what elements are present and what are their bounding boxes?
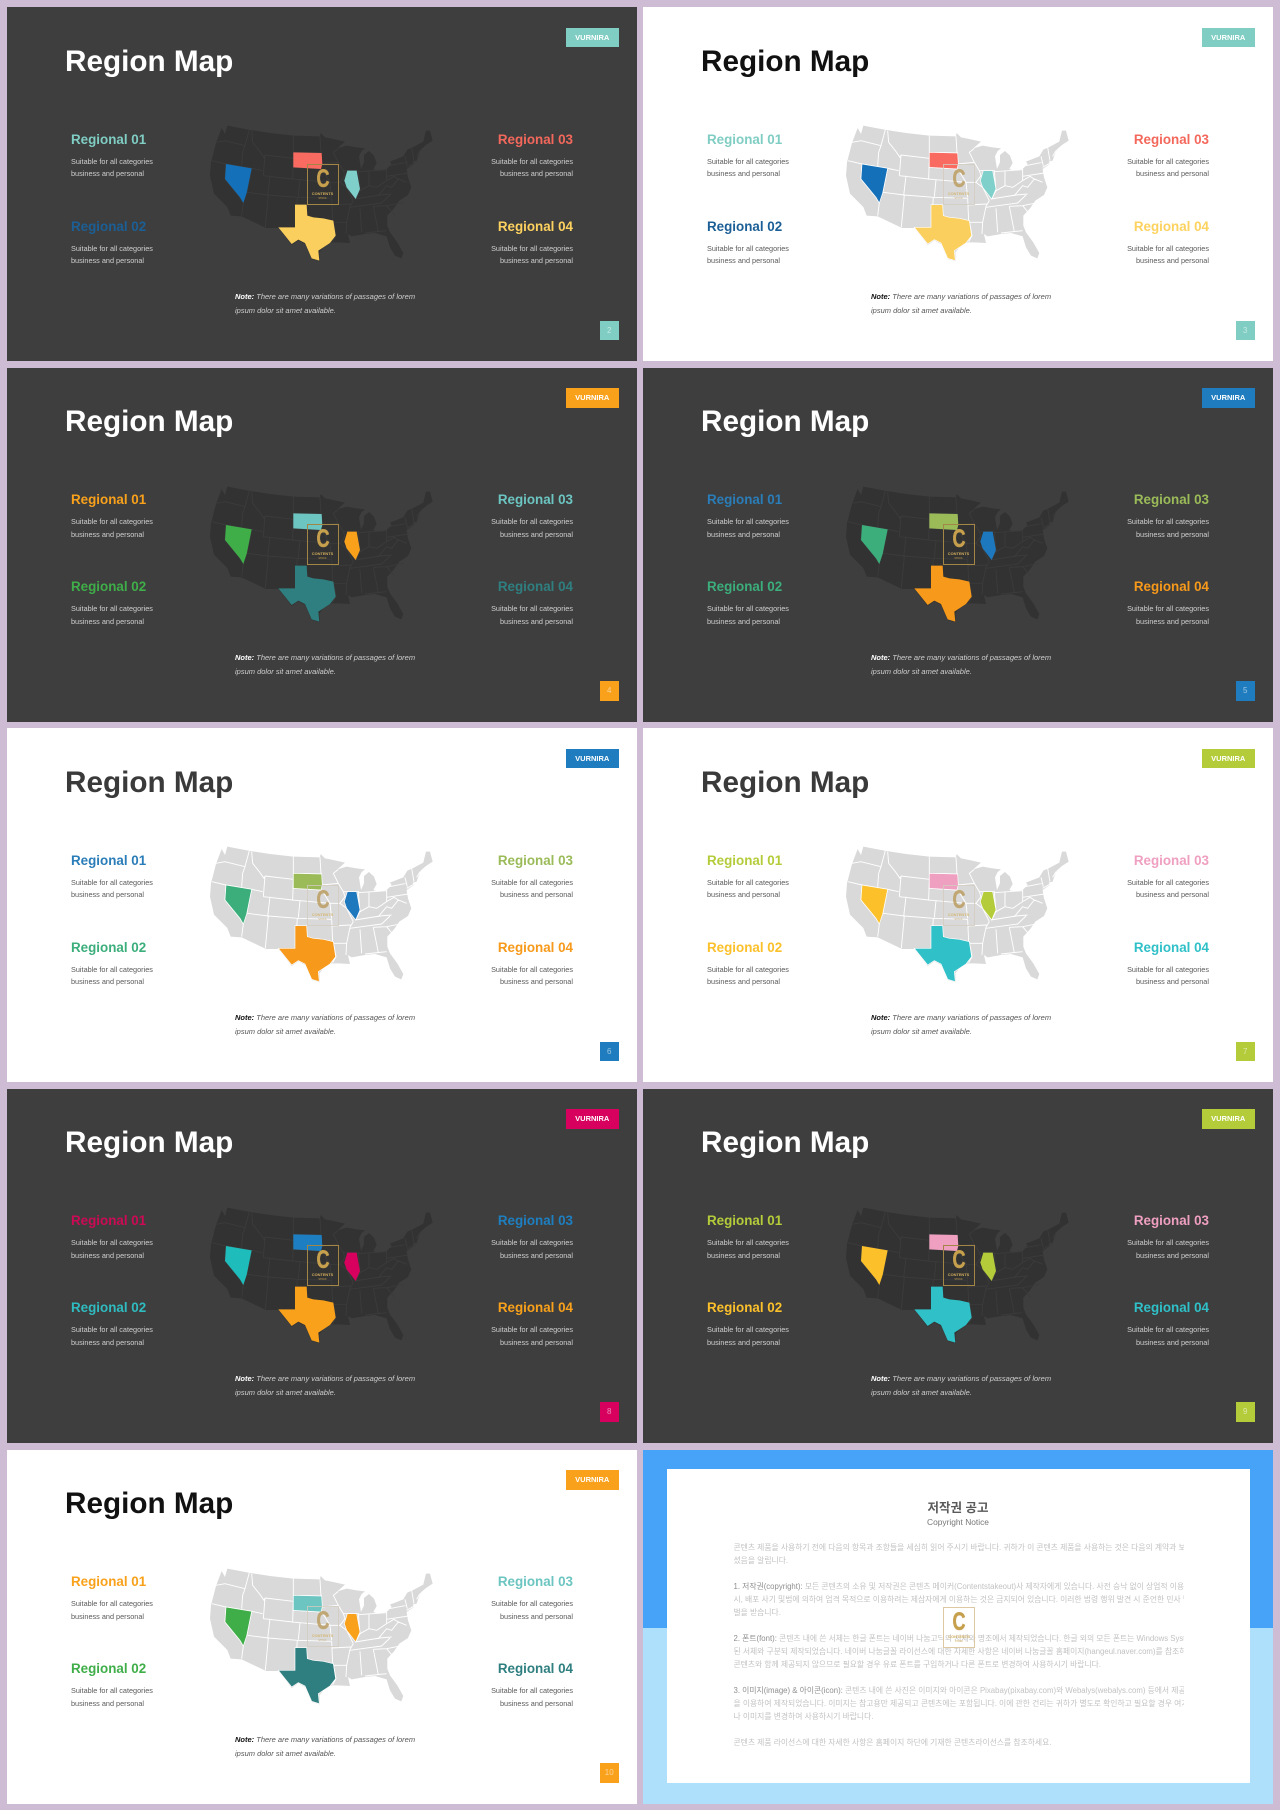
logo [306, 164, 338, 204]
region 03: business and personal [1136, 890, 1209, 899]
copyright body text: 콘텐츠 제품 라이선스에 대한 자세한 사항은 홈페이지 하단에 기재한 콘텐츠라이선스를 참조하세요. [734, 1738, 1051, 1747]
region 01: Suitable for all categories [707, 517, 789, 526]
region 02: Regional 02 [71, 579, 146, 594]
tag: VURNIRA [1202, 388, 1255, 408]
region 01 [71, 492, 153, 539]
region 04: Suitable for all categories [491, 1686, 573, 1695]
page number [600, 320, 619, 340]
tag: VURNIRA [566, 28, 619, 47]
region 04: Regional 04 [1134, 218, 1209, 234]
page number [1236, 1402, 1255, 1422]
region 02: business and personal [707, 1338, 780, 1347]
region 04: Regional 04 [1134, 1300, 1209, 1315]
logo [306, 1606, 338, 1647]
region 04 [491, 218, 573, 265]
page number [600, 1763, 619, 1782]
region 01 [71, 1572, 201, 1624]
logo: CONTENTS [948, 912, 969, 916]
region 01: Suitable for all categories [71, 1599, 153, 1608]
page number: 10 [605, 1768, 614, 1777]
region 03: Regional 03 [1134, 1213, 1209, 1228]
tag: VURNIRA [1202, 28, 1255, 47]
region 04: Suitable for all categories [491, 965, 573, 974]
region 04: business and personal [500, 1699, 573, 1708]
page number: 3 [1243, 326, 1247, 334]
region 02: Regional 02 [707, 218, 782, 234]
region 03 [1127, 852, 1209, 899]
map of US states [7, 1450, 637, 1804]
logo [306, 884, 338, 926]
region 02: business and personal [707, 617, 780, 626]
region 03 [443, 1572, 573, 1624]
region 04: Suitable for all categories [1127, 965, 1209, 974]
tag: VURNIRA [566, 1470, 619, 1490]
copyright subtitle: Copyright Notice [927, 1517, 989, 1527]
map of US states [210, 487, 432, 622]
copyright body text: 벌을 받습니다. [734, 1608, 781, 1617]
region 03: Suitable for all categories [1127, 1238, 1209, 1247]
tag: VURNIRA [1202, 1109, 1255, 1128]
region 02: Regional 02 [707, 1300, 782, 1315]
tag: VURNIRA: VURNIRA [575, 393, 609, 402]
copyright body text: 콘텐츠와 함께 제공되지 않으므로 필요할 경우 유료 폰트를 구입하거나 다른 폰트로 변경하여 사용하시기 바랍니다. [734, 1660, 1101, 1669]
region 01: Regional 01 [707, 1213, 782, 1228]
region 04: business and personal [1136, 256, 1209, 265]
region 01: business and personal [707, 169, 780, 178]
region 02 [71, 579, 153, 626]
region 03: business and personal [500, 1251, 573, 1260]
region 01: Suitable for all categories [71, 1238, 153, 1247]
region 04: business and personal [500, 1338, 573, 1347]
region 03: Regional 03 [498, 852, 573, 868]
note: Note: There are many variations of passages of lorem [235, 652, 415, 662]
copyright body text [734, 1541, 1184, 1753]
region 03: business and personal [500, 1612, 573, 1621]
title: Region Map [701, 44, 869, 78]
region 04 [443, 1298, 573, 1350]
region 02 [71, 218, 153, 265]
region 03: Suitable for all categories [1127, 157, 1209, 166]
logo: STOCK [955, 1640, 963, 1642]
region 01 [71, 852, 153, 899]
logo: STOCK [318, 557, 327, 560]
region 01 [707, 132, 789, 178]
logo: CONTENTS [312, 912, 333, 916]
region 01: Suitable for all categories [707, 157, 789, 166]
logo: C [316, 1246, 329, 1274]
map of US states [846, 126, 1068, 262]
region 04 [443, 1659, 573, 1711]
region 02: Suitable for all categories [71, 604, 153, 613]
logo: C [316, 1607, 329, 1635]
note [871, 292, 1051, 315]
region 03: Regional 03 [1134, 852, 1209, 868]
map of US states [643, 1088, 1273, 1442]
region 03: Suitable for all categories [1127, 878, 1209, 887]
region 02: Regional 02 [71, 1300, 146, 1315]
logo: C [952, 525, 965, 553]
region 04: Regional 04 [1134, 579, 1209, 594]
note: ipsum dolor sit amet available. [871, 306, 972, 315]
region 03 [491, 492, 573, 539]
page number: 8 [607, 1407, 611, 1416]
logo [306, 1245, 338, 1286]
title: Region Map [65, 1126, 233, 1159]
logo: STOCK [954, 557, 963, 560]
panel: slide 3 light [643, 7, 1273, 361]
region 03: Regional 03 [498, 132, 573, 146]
region 03 [1079, 1211, 1209, 1263]
note: ipsum dolor sit amet available. [235, 1748, 336, 1758]
note [871, 652, 1051, 676]
white card [666, 1469, 1250, 1783]
note: ipsum dolor sit amet available. [871, 666, 972, 676]
note [871, 1372, 1071, 1400]
note: Note: There are many variations of passages of lorem [871, 1013, 1051, 1022]
title: Region Map [701, 1126, 869, 1159]
logo [942, 884, 974, 926]
region 03: Suitable for all categories [491, 517, 573, 526]
note: Note: There are many variations of passages of lorem [871, 652, 1051, 662]
region 01: Suitable for all categories [71, 878, 153, 887]
note [235, 1013, 415, 1036]
region 03: Suitable for all categories [491, 878, 573, 887]
logo: C [316, 525, 329, 553]
region 03: business and personal [500, 530, 573, 539]
tag: VURNIRA [1202, 748, 1255, 768]
page number [1236, 1042, 1255, 1061]
logo [942, 1245, 974, 1286]
region 04: Suitable for all categories [491, 244, 573, 253]
region 01: business and personal [707, 530, 780, 539]
panel: slide 8 dark [7, 1088, 637, 1442]
region 03 [491, 852, 573, 899]
panel: slide 7 light [643, 728, 1273, 1082]
map of US states [210, 1208, 432, 1343]
tag: VURNIRA: VURNIRA [575, 32, 609, 42]
logo: CONTENTS [312, 190, 333, 196]
page number: 5 [1243, 686, 1247, 695]
region 04 [1127, 579, 1209, 626]
title: Region Map [65, 766, 233, 798]
region 01 [71, 132, 153, 178]
page number: 7 [1243, 1046, 1247, 1056]
logo: CONTENTS [312, 551, 333, 556]
region 04 [491, 940, 573, 986]
region 02 [707, 940, 789, 986]
region 01: business and personal [71, 890, 144, 899]
region 02: Regional 02 [71, 218, 146, 234]
page number [600, 681, 619, 700]
note [235, 1732, 435, 1760]
region 02: business and personal [71, 1338, 144, 1347]
region 02: business and personal [707, 977, 780, 986]
region 03: Regional 03 [498, 492, 573, 507]
note: ipsum dolor sit amet available. [871, 1388, 972, 1396]
region 03: Suitable for all categories [491, 157, 573, 166]
region 01 [71, 1213, 153, 1260]
region 03: Suitable for all categories [491, 1238, 573, 1247]
map of US states [846, 487, 1068, 622]
logo: C [952, 1246, 965, 1274]
panel: copyright notice [643, 1450, 1273, 1804]
region 04: Regional 04 [498, 940, 573, 954]
logo: CONTENTS [312, 1633, 333, 1638]
region 01: Regional 01 [71, 132, 146, 146]
region 02 [71, 1659, 201, 1711]
region 01: Suitable for all categories [707, 1238, 789, 1247]
region 03: business and personal [500, 169, 573, 178]
note: Note: There are many variations of passages of lorem [871, 1374, 1051, 1382]
region 01: Suitable for all categories [71, 157, 153, 166]
logo: STOCK [954, 1278, 963, 1281]
logo: C [952, 164, 965, 192]
region 02 [71, 940, 153, 986]
region 03: Suitable for all categories [491, 1599, 573, 1608]
region 01: Regional 01 [71, 1213, 146, 1228]
region 01: business and personal [71, 530, 144, 539]
logo: STOCK [318, 1278, 327, 1281]
map of US states [210, 846, 432, 982]
title: Region Map [65, 44, 233, 78]
page number [600, 1042, 619, 1061]
logo: STOCK [954, 196, 963, 200]
region 04: business and personal [1136, 617, 1209, 626]
region 02: Regional 02 [707, 579, 782, 594]
region 03: business and personal [1136, 530, 1209, 539]
note: Note: There are many variations of passages of lorem [235, 1374, 415, 1382]
region 01: Regional 01 [71, 492, 146, 507]
region 02: Regional 02 [71, 1661, 146, 1676]
region 01 [707, 492, 789, 539]
note: ipsum dolor sit amet available. [235, 1027, 336, 1036]
region 01 [707, 1211, 837, 1263]
region 04: business and personal [500, 256, 573, 265]
region 02 [707, 218, 789, 265]
region 01: Regional 01 [707, 852, 782, 868]
page number: 9 [1243, 1407, 1247, 1416]
region 02: Suitable for all categories [71, 965, 153, 974]
note: ipsum dolor sit amet available. [235, 666, 336, 676]
copyright body text: 셨음을 알립니다. [734, 1556, 788, 1565]
note: Note: There are many variations of passages of lorem [235, 1734, 415, 1744]
region 01: business and personal [71, 169, 144, 178]
region 04 [1079, 1298, 1209, 1350]
region 04 [1127, 218, 1209, 265]
region 02: Suitable for all categories [707, 1325, 789, 1334]
page number: 4 [607, 686, 611, 695]
region 04: Regional 04 [498, 218, 573, 234]
region 04: Suitable for all categories [491, 1325, 573, 1334]
note: Note: There are many variations of passages of lorem [235, 1013, 415, 1022]
region 04: Regional 04 [498, 579, 573, 594]
region 04: business and personal [500, 617, 573, 626]
note [871, 1013, 1051, 1036]
note: ipsum dolor sit amet available. [871, 1027, 972, 1036]
region 01: business and personal [71, 1612, 144, 1621]
region 02: Suitable for all categories [71, 244, 153, 253]
note: Note: There are many variations of passages of lorem [235, 292, 415, 301]
region 02: Suitable for all categories [707, 604, 789, 613]
logo [942, 164, 974, 204]
logo: CONTENTS [948, 1634, 970, 1638]
logo: STOCK [954, 918, 963, 920]
region 03: Regional 03 [498, 1213, 573, 1228]
tag: VURNIRA [566, 748, 619, 768]
region 04: Suitable for all categories [1127, 1325, 1209, 1334]
copyright body text: 나 이미지를 변경하여 사용하시기 바랍니다. [734, 1712, 873, 1721]
tag: VURNIRA: VURNIRA [1211, 393, 1245, 402]
logo [943, 1606, 975, 1648]
logo: STOCK [318, 1639, 327, 1642]
logo: C [952, 886, 965, 914]
region 04: Suitable for all categories [1127, 604, 1209, 613]
region 04: Regional 04 [1134, 940, 1209, 954]
region 02: business and personal [707, 256, 780, 265]
logo [942, 524, 974, 565]
region 02: business and personal [71, 977, 144, 986]
tag: VURNIRA: VURNIRA [575, 754, 609, 762]
title: Region Map [65, 1487, 233, 1520]
region 01: Regional 01 [71, 852, 146, 868]
map of US states [210, 126, 432, 261]
region 03 [491, 132, 573, 178]
tag: VURNIRA: VURNIRA [575, 1114, 609, 1123]
region 02: business and personal [71, 1699, 144, 1708]
panel: slide 4 dark [7, 368, 637, 722]
page number [1236, 681, 1255, 700]
region 03: Regional 03 [498, 1574, 573, 1589]
region 03: business and personal [1136, 1251, 1209, 1260]
logo: STOCK [318, 196, 327, 200]
region 03: business and personal [1136, 169, 1209, 178]
logo: C [952, 1608, 966, 1636]
title: Region Map [65, 405, 233, 438]
region 02: Regional 02 [707, 940, 782, 954]
tag: VURNIRA: VURNIRA [1211, 1114, 1245, 1123]
region 02: Suitable for all categories [71, 1686, 153, 1695]
region 02 [707, 1298, 837, 1350]
panel: slide 2 dark [7, 7, 637, 361]
logo: CONTENTS [312, 1272, 333, 1277]
region 02 [707, 579, 789, 626]
panel: slide 6 light [7, 728, 637, 1082]
region 03: Suitable for all categories [1127, 517, 1209, 526]
region 01: business and personal [707, 890, 780, 899]
title: Region Map [701, 766, 869, 798]
logo: STOCK [318, 918, 327, 920]
panel: slide 10 light [7, 1450, 637, 1804]
logo: C [316, 164, 329, 192]
tag: VURNIRA: VURNIRA [1211, 754, 1245, 762]
region 02: Suitable for all categories [71, 1325, 153, 1334]
note [235, 292, 415, 315]
region 01: Suitable for all categories [71, 517, 153, 526]
note [235, 1372, 435, 1400]
region 01: Regional 01 [71, 1574, 146, 1589]
tag: VURNIRA [566, 1109, 619, 1128]
region 04: Regional 04 [498, 1300, 573, 1315]
logo: CONTENTS [948, 1272, 969, 1277]
region 01: business and personal [707, 1251, 780, 1260]
page number: 2 [607, 326, 611, 334]
page number: 6 [607, 1046, 611, 1056]
region 01: Regional 01 [707, 132, 782, 146]
title: Region Map [701, 405, 869, 438]
logo: CONTENTS [948, 551, 969, 556]
region 02: business and personal [71, 256, 144, 265]
region 02: business and personal [71, 617, 144, 626]
region 02: Suitable for all categories [707, 244, 789, 253]
region 03 [1127, 492, 1209, 539]
logo: CONTENTS [948, 190, 969, 196]
panel: slide 5 dark [643, 368, 1273, 722]
page number [1236, 320, 1255, 340]
note: ipsum dolor sit amet available. [235, 306, 336, 315]
region 02 [71, 1300, 153, 1347]
panel: slide 9 dark [643, 1088, 1273, 1442]
region 04 [491, 579, 573, 626]
tag: VURNIRA [566, 388, 619, 408]
region 03: business and personal [500, 890, 573, 899]
region 04: business and personal [500, 977, 573, 986]
region 04: Regional 04 [498, 1661, 573, 1676]
region 01: Regional 01 [707, 492, 782, 507]
region 03 [1127, 132, 1209, 178]
logo [306, 524, 338, 565]
region 04: Suitable for all categories [491, 604, 573, 613]
note: Note: There are many variations of passages of lorem [871, 292, 1051, 301]
tag: VURNIRA: VURNIRA [575, 1475, 609, 1484]
note [235, 652, 415, 676]
note: ipsum dolor sit amet available. [235, 1388, 336, 1396]
region 03: Regional 03 [1134, 492, 1209, 507]
tag: VURNIRA: VURNIRA [1211, 32, 1245, 42]
map of US states [846, 846, 1068, 982]
copyright title: 저작권 공고 [928, 1500, 988, 1514]
region 02: Suitable for all categories [707, 965, 789, 974]
logo: C [316, 886, 329, 914]
region 04 [1127, 940, 1209, 986]
region 04: business and personal [1136, 1338, 1209, 1347]
page number [600, 1402, 619, 1422]
region 04: Suitable for all categories [1127, 244, 1209, 253]
region 01: Suitable for all categories [707, 878, 789, 887]
region 01 [707, 852, 789, 899]
region 01: business and personal [71, 1251, 144, 1260]
region 02: Regional 02 [71, 940, 146, 954]
region 03 [491, 1213, 573, 1260]
region 03: Regional 03 [1134, 132, 1209, 146]
region 04: business and personal [1136, 977, 1209, 986]
